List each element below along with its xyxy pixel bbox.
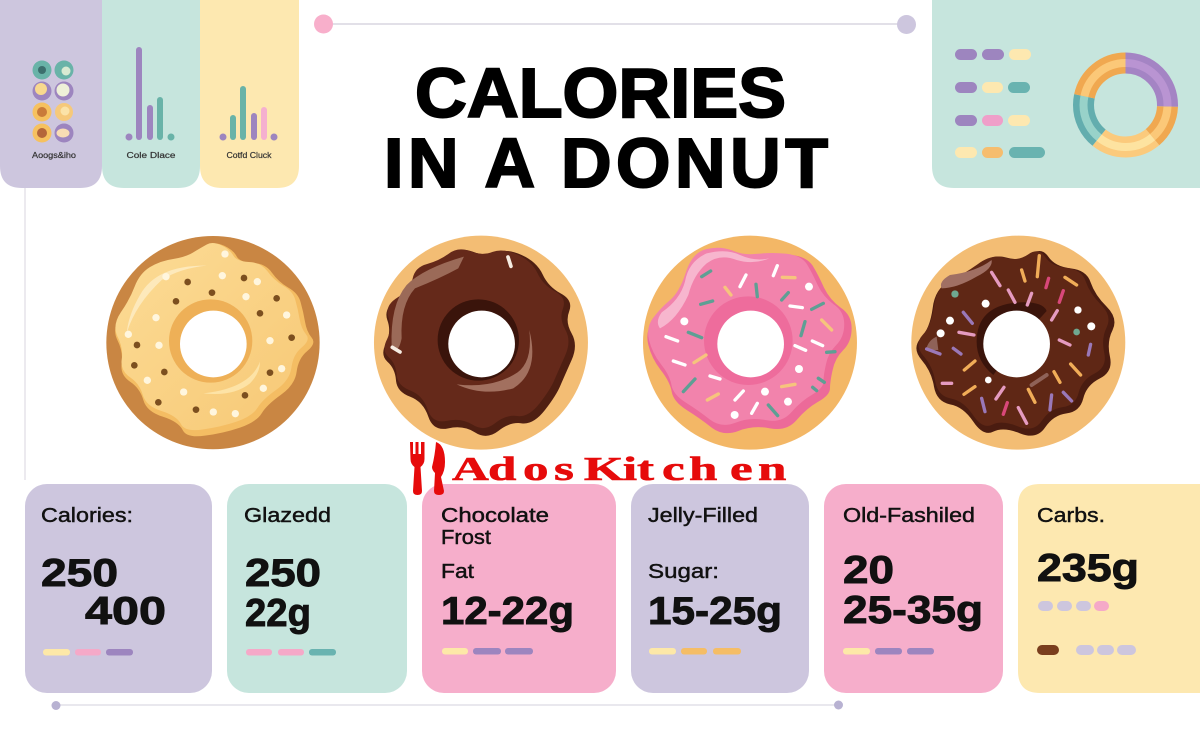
chart: yellow tab bars (220, 86, 278, 140)
value: 400 (85, 590, 166, 633)
pills (649, 648, 741, 654)
label: Frost (441, 527, 491, 549)
title: CALORIES (415, 54, 786, 132)
label: Chocolate (441, 505, 549, 527)
label: Old-Fashiled (843, 505, 975, 527)
label: Jelly-Filled (648, 505, 758, 527)
title (384, 54, 828, 202)
caption: third tab: Cotfd Cluck (226, 151, 273, 160)
panel: jelly-filled card (631, 484, 809, 693)
value: 12-22g (441, 590, 574, 633)
donut: chocolate with sprinkles (911, 236, 1125, 450)
bottom connector line with dots (52, 700, 843, 710)
top connector line with dots (314, 14, 916, 34)
pills (442, 648, 533, 654)
chart: mint tab bars (126, 47, 174, 140)
pills (43, 649, 133, 656)
legend pills (955, 49, 1045, 158)
panel: calories card (25, 484, 212, 693)
caption: second tab: Cole Dlace (126, 151, 176, 160)
pills row two (1037, 645, 1136, 655)
donut: glazed (106, 236, 320, 449)
label: Glazedd (244, 505, 331, 527)
icon: fork and knife (410, 442, 445, 495)
title: IN A DONUT (384, 124, 828, 202)
pills (843, 648, 934, 654)
icon: grid of small donuts (32, 60, 74, 142)
panel: old-fashioned card (824, 484, 1003, 693)
pills row one (1038, 601, 1109, 611)
value: 235g (1037, 547, 1139, 590)
value: 25-35g (843, 589, 983, 632)
value: 250 (245, 552, 321, 595)
panel: lavender icon tab (0, 0, 102, 188)
value: 15-25g (648, 590, 782, 633)
wordmark: AdosKitchen (452, 450, 786, 488)
label: Carbs. (1037, 505, 1105, 527)
label: Fat (441, 561, 474, 583)
panel: carbs card (1018, 484, 1200, 693)
donut: chocolate (374, 236, 588, 450)
panel: mint legend with ring chart (932, 0, 1200, 188)
value: 22g (245, 592, 311, 635)
caption: first tab: Aoogs&iho (32, 151, 77, 160)
label: Sugar: (648, 561, 719, 583)
value: 20 (843, 549, 894, 592)
panel: glazed card (227, 484, 407, 693)
chart: ring (1084, 63, 1168, 147)
watermark: AdosKitchen logo (410, 442, 786, 495)
pills (246, 649, 336, 656)
label: Calories: (41, 505, 133, 527)
panel: yellow bar tab (200, 0, 299, 188)
panel: chocolate frost card (422, 484, 616, 693)
panel: mint bar tab (102, 0, 200, 188)
value: 250 (41, 552, 118, 595)
donut: pink frosted (643, 236, 857, 450)
